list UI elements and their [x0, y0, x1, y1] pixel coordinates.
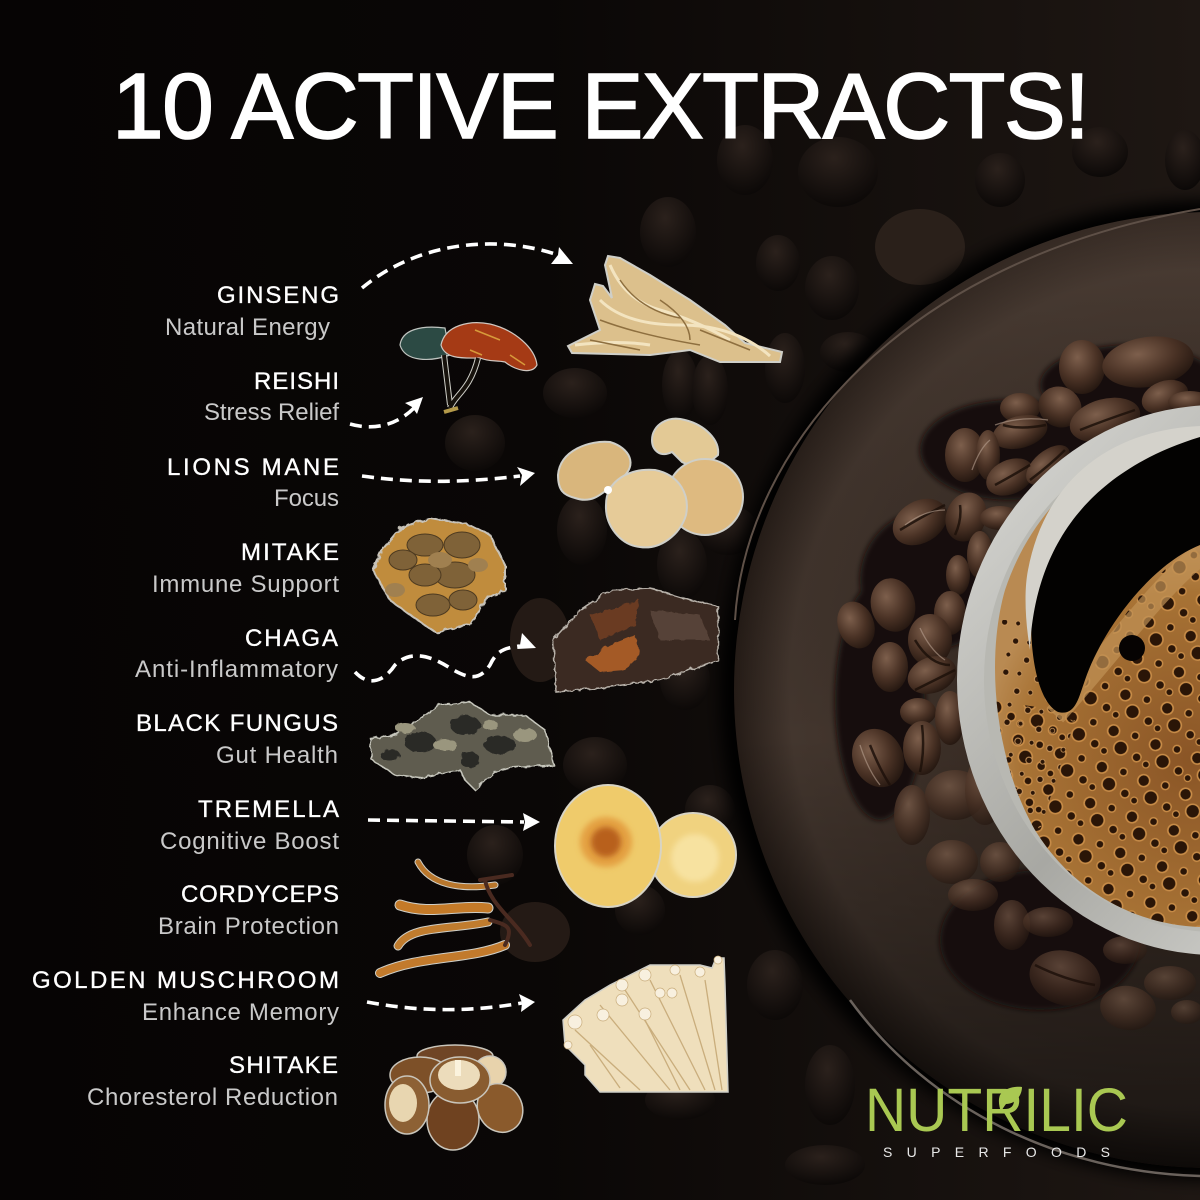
label: reishi: REISHI	[254, 368, 339, 395]
label: shitake	[87, 1052, 338, 1111]
label: chaga	[135, 625, 338, 683]
label: golden muschroom: GOLDEN MUSCHROOM	[32, 967, 339, 994]
label: lions mane: Focus	[274, 485, 339, 512]
logo: Nutrilic Superfoods: NUTRILIC	[865, 1076, 1128, 1144]
label: chaga: CHAGA	[245, 625, 338, 652]
label: ginseng: GINSENG	[217, 282, 339, 309]
arrow: lions mane	[362, 467, 535, 486]
label: lions mane	[167, 454, 339, 512]
image: black fungus	[370, 702, 554, 790]
image: tremella mushrooms	[555, 785, 736, 907]
label: mitake: Immune Support	[152, 571, 339, 598]
faint background coffee beans	[445, 125, 1200, 1185]
label: black fungus: BLACK FUNGUS	[136, 710, 338, 737]
label: ginseng	[165, 282, 339, 341]
arrow: ginseng	[362, 244, 573, 288]
label: cordyceps: CORDYCEPS	[181, 881, 339, 908]
label: golden muschroom	[32, 967, 339, 1026]
image: chaga	[553, 588, 718, 692]
label: tremella	[160, 796, 339, 855]
label: golden muschroom: Enhance Memory	[142, 999, 339, 1026]
label: shitake: SHITAKE	[229, 1052, 338, 1079]
image: ginseng root	[568, 256, 782, 362]
arrow: golden mushroom	[367, 994, 535, 1012]
label: tremella: TREMELLA	[198, 796, 339, 823]
image: enoki mushrooms	[563, 956, 728, 1092]
image: reishi mushroom	[400, 323, 537, 412]
arrow: chaga	[355, 633, 536, 681]
coffee cup	[957, 405, 1200, 955]
arrow: reishi	[350, 397, 423, 427]
image: cordyceps	[380, 862, 530, 973]
label: chaga: Anti-Inflammatory	[135, 656, 338, 683]
icon: leaf	[999, 1087, 1022, 1112]
title: 10 ACTIVE EXTRACTS!	[112, 54, 1090, 158]
label: black fungus: Gut Health	[216, 742, 338, 769]
arrow: tremella	[368, 813, 540, 831]
coffee beans around the cup	[831, 331, 1200, 1035]
label: black fungus	[136, 710, 338, 769]
label: cordyceps: Brain Protection	[158, 913, 339, 940]
label: cordyceps	[158, 881, 339, 940]
saucer	[720, 200, 1200, 1180]
label: ginseng: Natural Energy	[165, 314, 330, 341]
label: mitake	[152, 539, 339, 598]
label: reishi	[204, 368, 339, 426]
dark reflection on coffee	[1031, 437, 1200, 713]
image: shiitake mushrooms	[385, 1045, 532, 1150]
label: reishi: Stress Relief	[204, 399, 339, 426]
image: lions mane mushrooms	[558, 419, 743, 547]
logo: Nutrilic Superfoods: SUPERFOODS	[883, 1144, 1110, 1160]
coffee foam bubbles	[985, 545, 1200, 930]
label: tremella: Cognitive Boost	[160, 828, 339, 855]
label: mitake: MITAKE	[241, 539, 339, 566]
label: shitake: Choresterol Reduction	[87, 1084, 338, 1111]
image: maitake mushroom	[373, 518, 505, 632]
label: lions mane: LIONS MANE	[167, 454, 339, 481]
